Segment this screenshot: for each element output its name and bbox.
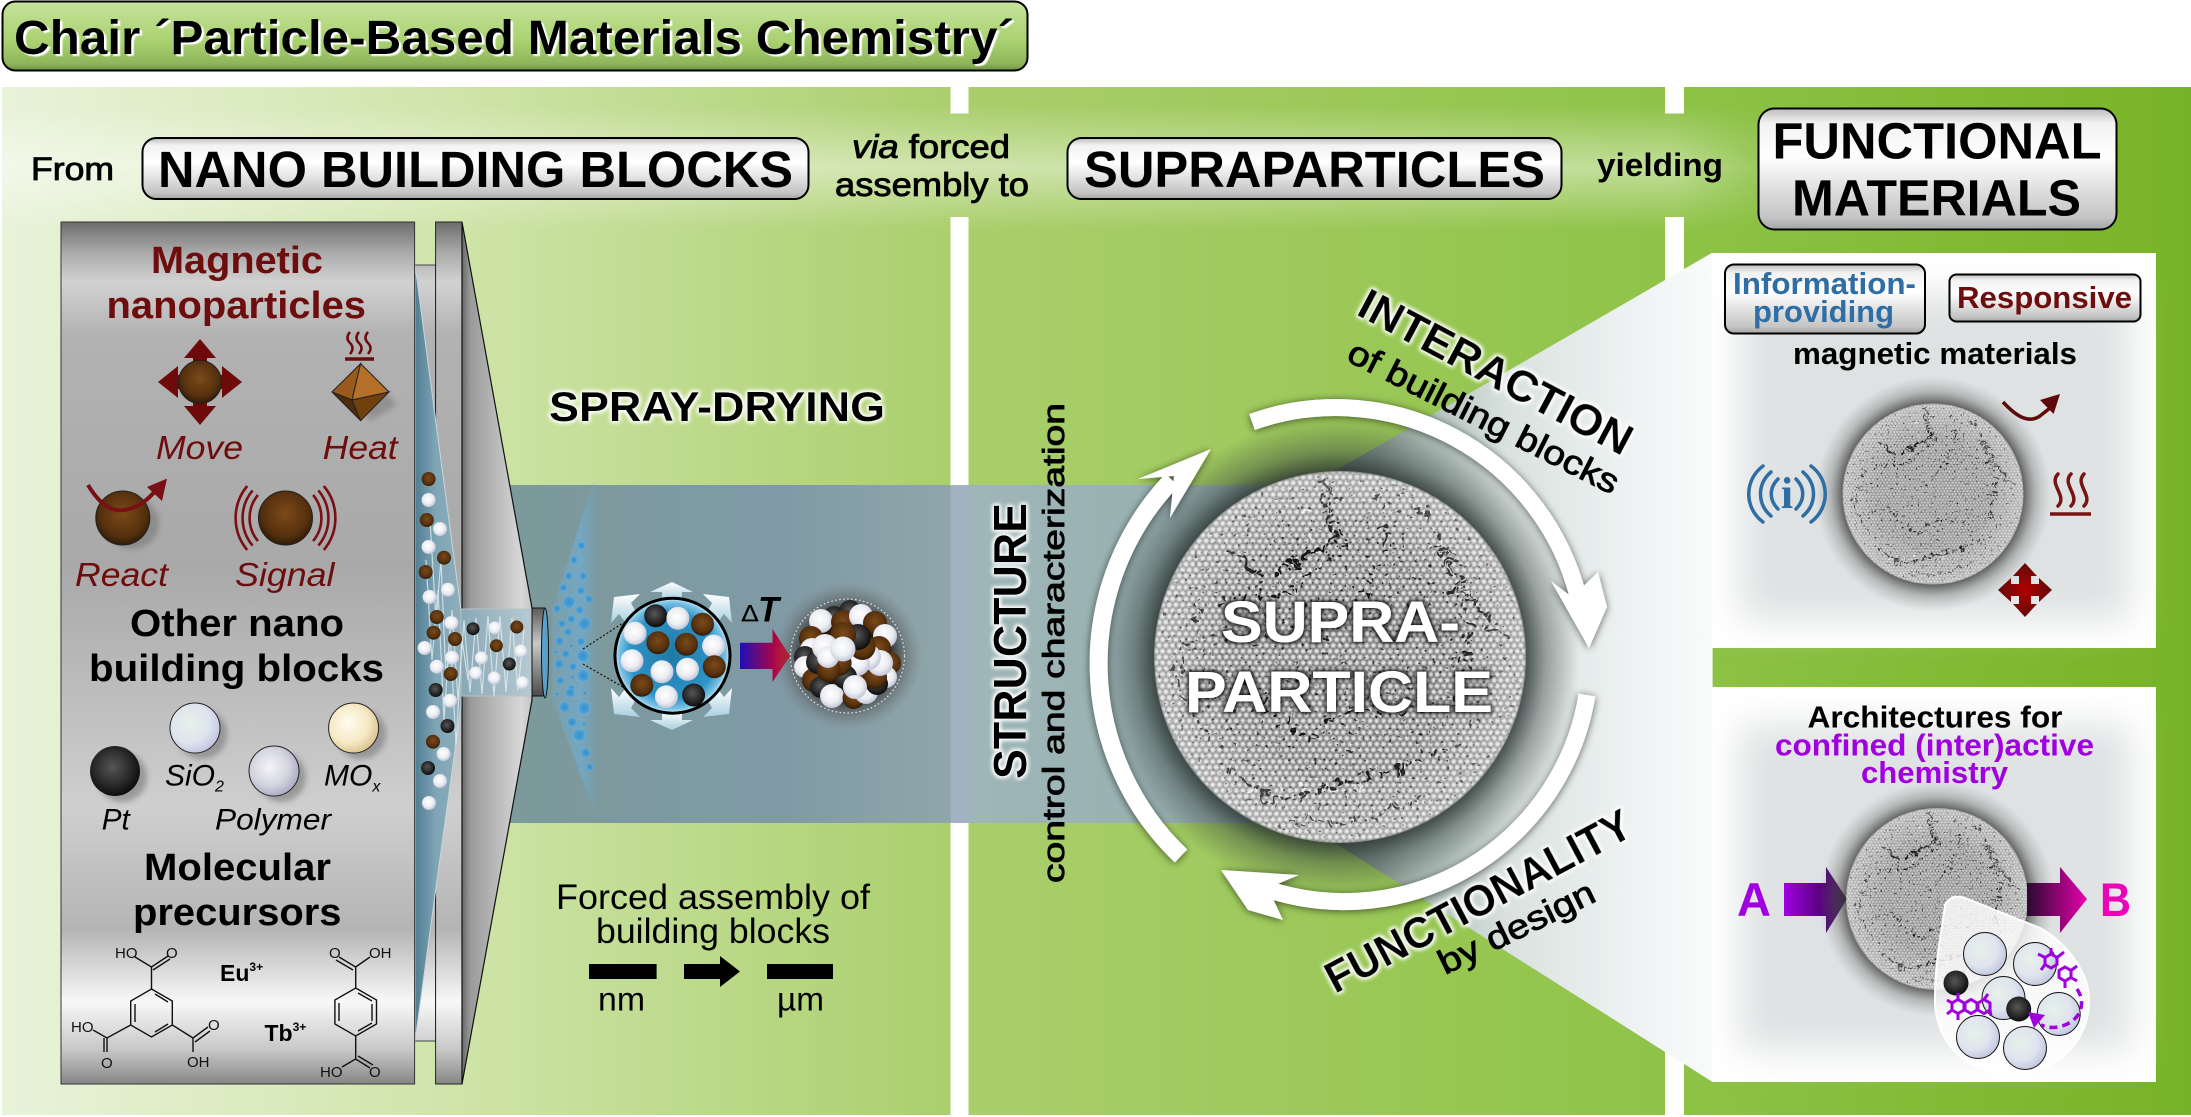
caption: architectures: chemistry [1861, 755, 2009, 790]
label: Pt: Pt [102, 804, 131, 836]
scale diagram: nm to micrometre: nm [598, 980, 645, 1018]
delta T drying arrow [740, 590, 790, 682]
label box: information-providing: providing [1753, 294, 1894, 329]
heading: magnetic nanoparticles [106, 240, 366, 327]
ball: metal oxide [329, 703, 386, 759]
heading: functional materials [1758, 108, 2116, 230]
spray dryer: cone [462, 222, 532, 1084]
panel: responsive and information-providing materials [1712, 253, 2156, 648]
delta T drying arrow: T [758, 590, 782, 630]
funnel from supraparticle to functional materials [1335, 252, 1713, 1082]
heading: other nano building blocks [89, 603, 384, 690]
label box: information-providing [1725, 264, 1925, 334]
heading: functionality: FUNCTIONALITY [1317, 800, 1640, 1003]
subtitle: magnetic materials: magnetic materials [1793, 336, 2077, 371]
label: react: React [75, 556, 170, 593]
molecule: trimesic acid: O [101, 1055, 113, 1072]
subheading: control and characterization: control and characterization [1036, 403, 1071, 883]
heading: interaction: INTERACTION [1350, 280, 1641, 465]
icon: signal [236, 486, 335, 550]
ball: platinum [90, 746, 147, 802]
spray cone with droplets [552, 483, 597, 815]
label: supra-particle: SUPRA- [1221, 590, 1460, 655]
caption: forced assembly: building blocks [596, 912, 830, 951]
heading row: from: From [31, 151, 114, 187]
label: terbium ion: Tb [264, 1020, 293, 1046]
molecule: trimesic acid: O [208, 1017, 220, 1034]
label: MOx: MO [324, 760, 372, 792]
label: signal: Signal [235, 556, 336, 593]
connector: via forced assembly to: via forced [852, 128, 1010, 165]
molecule: terephthalic acid: OH [369, 945, 392, 962]
label box: responsive: Responsive [1957, 280, 2132, 315]
label: SiO2: SiO [165, 760, 215, 792]
label: europium ion: 3+ [249, 960, 263, 974]
cycle arrow: interaction [1252, 408, 1607, 648]
spray dryer: tube [461, 609, 532, 696]
title banner: Chair ´Particle-Based Materials Chemistry´ [14, 12, 1014, 65]
ball: silica [170, 703, 227, 759]
icon: move arrows [1998, 563, 2052, 617]
heading: molecular precursors: precursors [133, 892, 342, 934]
scale diagram: nm to micrometre: µm [777, 980, 824, 1018]
molecule: trimesic acid: HO [115, 945, 138, 962]
large supraparticle halo [1100, 417, 1580, 897]
spray dryer: chamber [415, 265, 461, 1041]
ball: polymer [249, 746, 306, 802]
connector: via forced assembly to [835, 128, 1029, 203]
label: SiO2: 2 [214, 778, 224, 796]
small supraparticle [1815, 376, 2051, 612]
spray dryer: plate [436, 222, 462, 1084]
icon: react arrow [2003, 394, 2060, 419]
label: heat: Heat [323, 429, 400, 466]
heading: functional materials: FUNCTIONAL [1772, 112, 2102, 170]
reactant A and inlet arrow: A [1737, 873, 1771, 926]
panel: architectures for confined chemistry [1712, 687, 2156, 1082]
building blocks inside chamber [418, 472, 529, 810]
molecule: terephthalic acid: HO [320, 1064, 342, 1081]
small supraparticle [1819, 781, 2055, 1017]
heading: magnetic nanoparticles: nanoparticles [106, 285, 366, 327]
subheading: of building blocks: of building blocks [1341, 333, 1625, 502]
caption: architectures: confined (inter)active [1775, 728, 2094, 762]
molecule: terephthalic acid [320, 945, 392, 1081]
caption: architectures [1775, 700, 2094, 790]
label: terbium ion: 3+ [293, 1020, 306, 1034]
dried mini supraparticle [772, 581, 922, 731]
icon: heat [332, 332, 397, 422]
connector: yielding: yielding [1597, 147, 1723, 183]
spray dryer: nozzle [532, 608, 548, 698]
molecule: terephthalic acid: O [369, 1064, 381, 1081]
heading: functional materials: MATERIALS [1792, 170, 2081, 226]
molecule: trimesic acid: HO [71, 1019, 94, 1036]
icon: information signal: i [1781, 469, 1793, 518]
icon: react [88, 479, 167, 549]
wave inside chamber and tube [426, 520, 524, 745]
panel: device building blocks [61, 222, 415, 1084]
caption: architectures: Architectures for [1808, 700, 2062, 734]
delta T drying arrow: Δ [741, 602, 759, 628]
connector: via forced assembly to: assembly to [835, 166, 1029, 203]
icon: heat [2050, 474, 2091, 514]
label box: information-providing: Information- [1733, 266, 1916, 301]
molecule: trimesic acid: O [166, 945, 178, 962]
label: supra-particle: PARTICLE [1185, 660, 1493, 725]
zoom droplet with internal structure [1935, 897, 2089, 1075]
large supraparticle [1154, 471, 1526, 843]
product B and outlet arrow: B [2100, 873, 2131, 926]
product B and outlet arrow [2027, 867, 2131, 933]
cycle arrow: structure [1099, 449, 1211, 856]
icon: information signal [1749, 466, 1825, 522]
label: MOx: x [371, 778, 381, 796]
heading: molecular precursors [133, 847, 342, 934]
heading: magnetic nanoparticles: Magnetic [151, 240, 323, 282]
caption: forced assembly [556, 878, 870, 951]
icon: move [158, 339, 242, 425]
scale diagram: nm to micrometre [589, 956, 833, 1018]
spray dryer: feed connector [415, 265, 436, 1041]
beam from spray dryer to supraparticle [510, 485, 1340, 823]
reactant A and inlet arrow [1737, 867, 1847, 933]
droplet zoom with shrinking arrows [583, 582, 732, 730]
heading: other nano building blocks: Other nano [130, 603, 344, 645]
heading: molecular precursors: Molecular [144, 847, 331, 889]
heading: other nano building blocks: building blocks [89, 648, 384, 690]
label: move: Move [156, 429, 243, 466]
label: polymer: Polymer [215, 804, 332, 836]
heading: structure: STRUCTURE [984, 503, 1036, 779]
heading: supraparticles: SUPRAPARTICLES [1084, 141, 1545, 198]
molecule: terephthalic acid: O [329, 945, 341, 962]
label box: responsive [1950, 274, 2140, 322]
caption: forced assembly: Forced assembly of [556, 878, 870, 917]
label: europium ion: Eu [220, 960, 249, 986]
label: supra-particle [1185, 590, 1493, 725]
subheading: by design: by design [1432, 874, 1601, 982]
molecule: trimesic acid: OH [187, 1054, 210, 1071]
heading: spray-drying: SPRAY-DRYING [549, 383, 885, 430]
cycle arrow: functionality [1221, 695, 1587, 920]
heading: nano building blocks: NANO BUILDING BLOCKS [158, 141, 793, 198]
molecule: trimesic acid [71, 945, 220, 1072]
